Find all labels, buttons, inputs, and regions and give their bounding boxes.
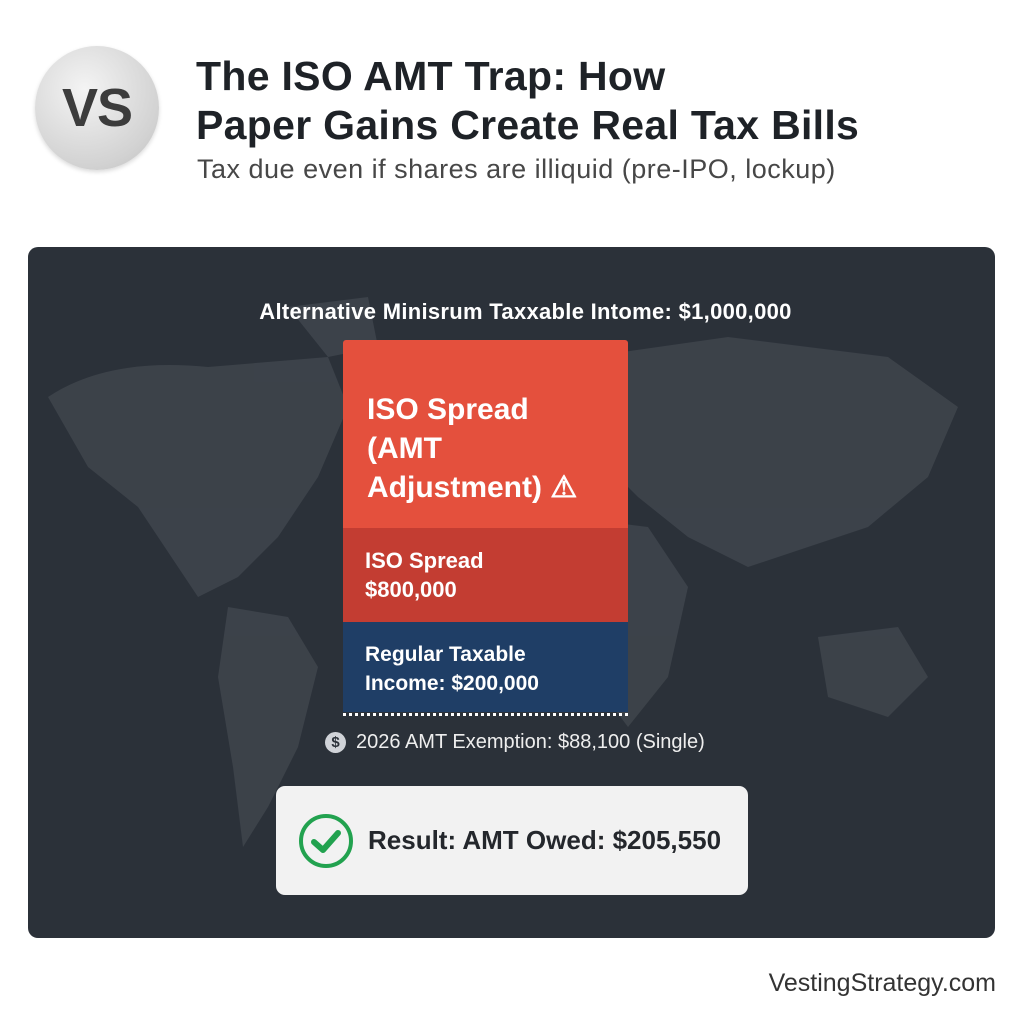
panel: main dark map panel	[28, 247, 995, 938]
stacked bar	[343, 340, 628, 716]
exemption note: $	[331, 734, 340, 751]
footer: VestingStrategy.com	[769, 969, 996, 997]
callout: result: Result: AMT Owed: $205,550	[368, 825, 721, 855]
segment: ISO spread AMT adjustment	[343, 340, 628, 528]
callout: result	[276, 786, 748, 895]
segment: ISO spread AMT adjustment: ISO Spread	[367, 393, 529, 426]
title	[196, 53, 859, 148]
icon: VS badge: VS	[62, 78, 132, 138]
subtitle: Tax due even if shares are illiquid (pre-IPO, lockup)	[197, 154, 836, 184]
segment: ISO spread $800,000	[343, 528, 628, 622]
world map silhouette	[48, 297, 958, 846]
exemption note: 2026 AMT Exemption: $88,100 (Single)	[356, 731, 705, 753]
segment: regular taxable income: Regular Taxable	[365, 643, 526, 666]
segment: ISO spread AMT adjustment: (AMT	[367, 432, 442, 465]
segment: ISO spread AMT adjustment: Adjustment) ⚠	[367, 471, 577, 504]
icon: check	[299, 814, 353, 868]
segment: regular taxable income	[343, 622, 628, 712]
icon: VS badge	[35, 46, 159, 170]
segment: regular taxable income: Income: $200,000	[365, 672, 539, 695]
segment: ISO spread $800,000: $800,000	[365, 577, 457, 602]
title: Paper Gains Create Real Tax Bills	[196, 102, 859, 148]
title: The ISO AMT Trap: How	[196, 53, 665, 99]
chart heading: Alternative Minisrum Taxxable Intome: $1,000,000	[259, 299, 792, 324]
segment: ISO spread $800,000: ISO Spread	[365, 548, 484, 573]
